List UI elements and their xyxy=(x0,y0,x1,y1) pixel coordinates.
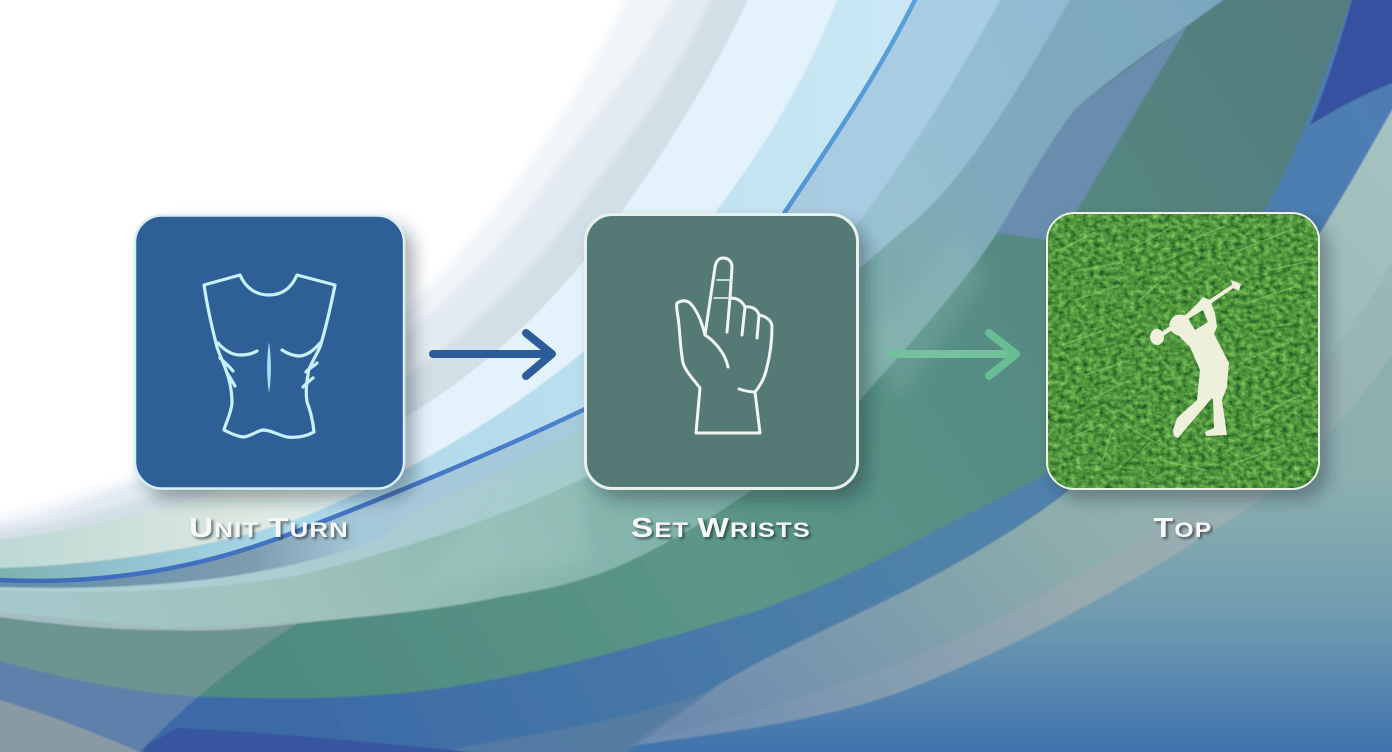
arrow: set wrists to top xyxy=(893,333,1016,376)
heading: top: TOP xyxy=(1154,512,1212,543)
icon: golfer silhouette xyxy=(1150,280,1241,438)
icon: torso outline xyxy=(204,275,335,437)
heading: set wrists: SET WRISTS xyxy=(631,512,811,543)
arrow: unit turn to set wrists xyxy=(433,333,552,376)
panel: set wrists card xyxy=(586,214,858,488)
icon: hand with raised finger xyxy=(677,258,772,433)
panel: top card with grass xyxy=(1048,214,1318,488)
panel: unit turn card xyxy=(135,216,404,488)
grass texture xyxy=(1048,214,1318,488)
heading: unit turn: UNIT TURN xyxy=(189,512,349,543)
